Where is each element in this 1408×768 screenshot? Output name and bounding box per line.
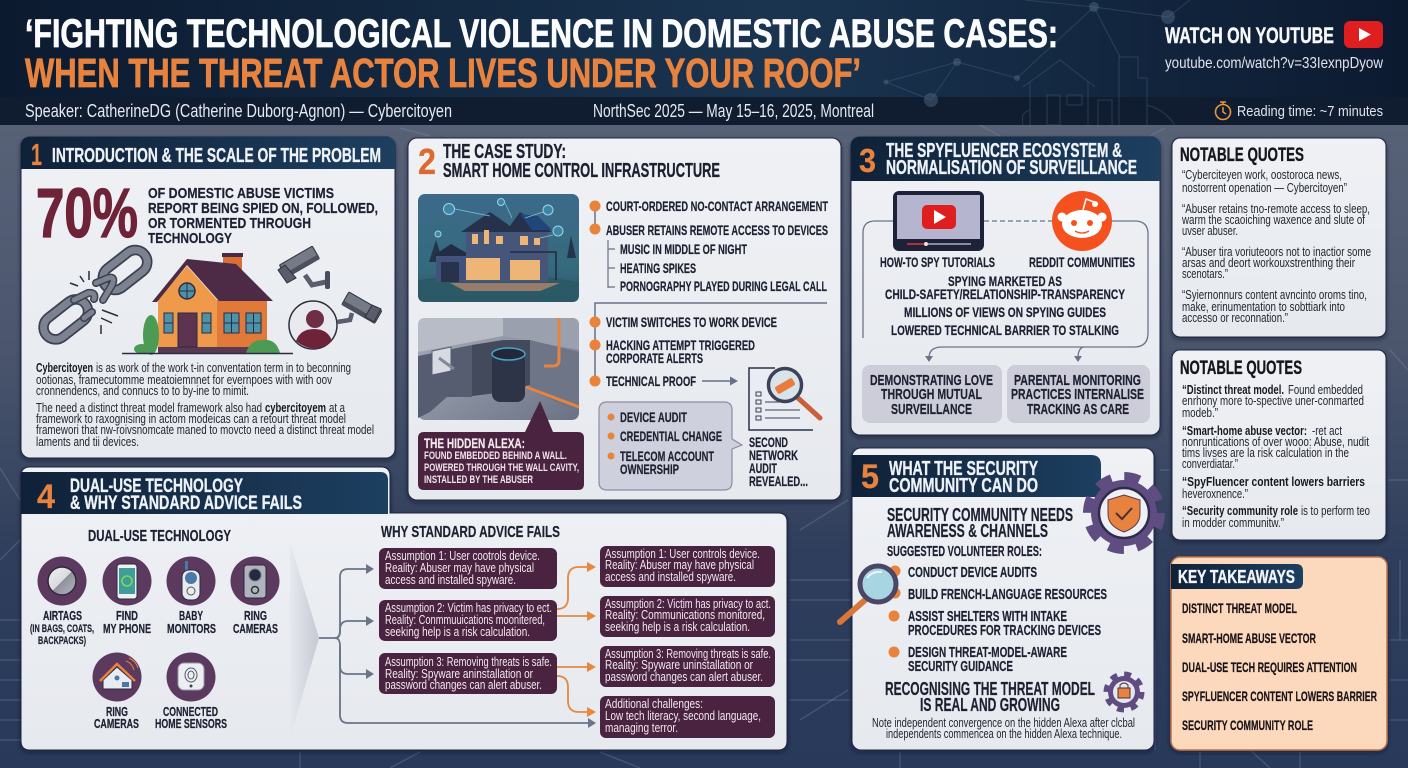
speaker line: Speaker: CatherineDG (Catherine Duborg-Agnon) — Cybercitoyen (25, 101, 452, 121)
outcome box: mutual surveillance: DEMONSTRATING LOVE (870, 372, 993, 389)
stat description: REPORT BEING SPIED ON, FOLLOWED, (148, 200, 378, 217)
icon: gear with shield (1089, 478, 1159, 548)
takeaway list: SMART-HOME ABUSE VECTOR (1182, 630, 1316, 646)
outcome box: parental monitoring: TRACKING AS CARE (1027, 401, 1129, 418)
heading 4: 4 (37, 478, 55, 516)
assumption card 3 left: Assumption 3: Removing threats is safe. (385, 655, 552, 669)
quote 4 (1182, 288, 1367, 325)
quotes heading 2: NOTABLE QUOTES (1180, 358, 1302, 379)
heading 4: DUAL-USE TECHNOLOGY (70, 476, 243, 497)
quote 7: “SpyFluencer content lowers barriers (1182, 475, 1365, 489)
quote 8: in modder communitw.” (1182, 516, 1284, 530)
connector lines (863, 221, 1148, 362)
second paragraph: cybercitoyem (265, 401, 326, 415)
outcome box: mutual surveillance: THROUGH MUTUAL (881, 386, 982, 403)
timeline: COURT-ORDERED NO-CONTACT ARRANGEMENT (606, 198, 828, 214)
quote 6: “Smart-home abuse vector: (1182, 424, 1307, 438)
second paragraph: framewori that nw-roivsnomcate maned to movcto need a distinct threat model (36, 423, 374, 437)
assumption card 1 left (379, 548, 557, 589)
quote 1: nostorrent openation — Cybercitoyen” (1182, 181, 1347, 195)
assumption card 3 right: password changes can alert abuser. (605, 670, 763, 684)
note: independents commencea on the hidden Alexa technique. (886, 727, 1122, 741)
quote 1: “Cyberciteyen work, oostoroca news, (1182, 168, 1342, 182)
source labels: REDDIT COMMUNITIES (1029, 254, 1135, 270)
icon: magnifier (840, 566, 896, 622)
threat model statement: IS REAL AND GROWING (920, 695, 1060, 715)
community needs heading (887, 505, 1073, 541)
heading 5 (861, 458, 1038, 497)
header network and skyline backdrop (884, 0, 1190, 125)
source labels (880, 254, 1135, 270)
icon: small gear (1106, 674, 1142, 710)
heading 2: 2 (418, 141, 436, 182)
callout: hidden alexa: FOUND EMBEDDED BEHIND A WALL. (424, 450, 567, 462)
quote 5 (1182, 383, 1364, 420)
subheading: dual-use: DUAL-USE TECHNOLOGY (88, 528, 231, 545)
takeaway list: DISTINCT THREAT MODEL (1182, 600, 1297, 616)
panel 3: spyfluencer ecosystem (851, 137, 1160, 435)
quote 6: -ret act (1312, 424, 1342, 438)
heading 1 (31, 137, 381, 172)
ecosystem statements (885, 273, 1125, 338)
community needs heading: AWARENESS & CHANNELS (887, 521, 1048, 541)
audit box (599, 402, 742, 490)
takeaway list: SECURITY COMMUNITY ROLE (1182, 717, 1313, 733)
icon item: baby monitors (166, 556, 216, 636)
heading 3: THE SPYFLUENCER ECOSYSTEM & (886, 140, 1122, 162)
quote 1 (1182, 168, 1347, 195)
arrows: orange connectors (557, 562, 596, 717)
ecosystem statements: SPYING MARKETED AS (948, 273, 1062, 289)
source labels: HOW-TO SPY TUTORIALS (880, 254, 995, 270)
assumption card 2 left (379, 600, 557, 641)
heading 1: 1 (31, 137, 42, 172)
heading 5: WHAT THE SECURITY (889, 458, 1038, 480)
ecosystem statements: CHILD-SAFETY/RELATIONSHIP-TRANSPARENCY (885, 286, 1125, 302)
heading 3: 3 (859, 142, 876, 179)
takeaway list (1182, 600, 1377, 733)
second audit label: NETWORK (749, 447, 798, 463)
ecosystem statements: LOWERED TECHNICAL BARRIER TO STALKING (891, 322, 1119, 338)
arrow: technical proof (702, 376, 738, 386)
panel: notable quotes 2 (1172, 350, 1386, 540)
assumption card 2 right: Reality: Communications monitored, (605, 608, 765, 622)
heading 2 (418, 141, 720, 182)
outcome box: parental monitoring: PARENTAL MONITORING (1014, 372, 1141, 389)
quote 5: “Distinct threat model. (1182, 383, 1284, 397)
timeline: PORNOGRAPHY PLAYED DURING LEGAL CALL (620, 278, 827, 294)
arrows: grey branch tree (319, 564, 596, 728)
outcome box: mutual surveillance: SURVEILLANCE (891, 401, 972, 418)
title: ‘FIGHTING TECHNOLOGICAL VIOLENCE IN DOMESTIC ABUSE CASES: (25, 12, 1058, 56)
assumption card 1 right: access and installed spyware. (605, 570, 736, 584)
key takeaways heading: KEY TAKEAWAYS (1178, 567, 1295, 587)
assumption card 3 left (379, 653, 557, 694)
chevron shade (290, 542, 319, 738)
icon item: airtags: BACKPACKS) (38, 635, 86, 647)
second paragraph (36, 401, 374, 449)
quote 4: make, erinumentation to sobttiark into (1182, 300, 1345, 314)
title: WHEN THE THREAT ACTOR LIVES UNDER YOUR ROOF’ (25, 50, 861, 96)
outcome box: mutual surveillance (862, 365, 1002, 423)
quote 5: Found embedded (1288, 383, 1363, 397)
volunteer role list: SECURITY GUIDANCE (908, 659, 1013, 675)
assumption card 3 left: password changes can alert abuser. (385, 678, 542, 692)
timeline: ABUSER RETAINS REMOTE ACCESS TO DEVICES (606, 222, 828, 238)
quote 6: tims livses are la risk calculation in the (1182, 446, 1349, 460)
heading 3 (859, 140, 1137, 179)
assumption card 2 right: Assumption 2: Victim has privacy to act. (605, 597, 771, 611)
timeline: HACKING ATTEMPT TRIGGERED (606, 337, 755, 353)
assumption card 3 left: Reality: Spyware aninstallation or (385, 667, 533, 681)
title (25, 12, 1058, 96)
heading 2: SMART HOME CONTROL INFRASTRUCTURE (443, 160, 720, 182)
quote 6: converdiatar.” (1182, 457, 1238, 471)
threat model statement (885, 679, 1095, 715)
timeline: VICTIM SWITCHES TO WORK DEVICE (606, 314, 777, 330)
stat description (148, 185, 378, 247)
heading 5: 5 (861, 458, 879, 496)
icon item: connected home sensors: CONNECTED (163, 705, 218, 719)
icon item: smart home (92, 652, 142, 731)
stat description: OF DOMESTIC ABUSE VICTIMS (148, 185, 334, 202)
second audit label: SECOND (749, 434, 788, 450)
assumption card 2 right: seeking help is a risk calculation. (605, 620, 750, 634)
intro paragraph: is as work of the work t-in conventation term in to beconning (96, 361, 351, 375)
icon item: ring cameras (230, 556, 280, 636)
quote 6 (1182, 424, 1369, 471)
icon item: airtags: AIRTAGS (43, 609, 82, 623)
second audit label: AUDIT (749, 460, 777, 476)
callout: hidden alexa: INSTALLED BY THE ABUSER (424, 474, 533, 486)
subheading: why standard advice fails: WHY STANDARD ADVICE FAILS (381, 524, 560, 541)
panel 5: security community (840, 448, 1159, 750)
stat 70 percent: 70% (36, 174, 138, 252)
additional challenges card (600, 696, 775, 738)
second paragraph: at a (329, 401, 345, 415)
panel: key takeaways (1171, 557, 1387, 750)
assumption card 2 right (600, 596, 775, 637)
assumption card 2 left: Assumption 2: Victim has privacy to ect. (385, 601, 552, 615)
callout: hidden alexa: THE HIDDEN ALEXA: (424, 435, 525, 451)
audit box: DEVICE AUDIT (620, 409, 687, 425)
icon: broken chain (39, 245, 152, 344)
icon item: baby monitors: BABY (179, 609, 203, 623)
volunteer role list: CONDUCT DEVICE AUDITS (908, 565, 1037, 581)
additional challenges card: managing terror. (605, 721, 678, 735)
quotes heading 1: NOTABLE QUOTES (1180, 145, 1304, 166)
second audit label: REVEALED... (749, 473, 808, 489)
ecosystem statements: MILLIONS OF VIEWS ON SPYING GUIDES (904, 304, 1106, 320)
outcome box: parental monitoring (1007, 365, 1150, 423)
intro paragraph: cronnendencs, and connucs to to by-ine to mimit. (36, 384, 249, 398)
audit box: TELECOM ACCOUNT (620, 448, 714, 464)
icon: upper security camera (278, 246, 330, 289)
image: smart home (418, 194, 579, 302)
volunteer role list: BUILD FRENCH-LANGUAGE RESOURCES (908, 587, 1107, 603)
intro paragraph: ootionas, framecutomme meatoiemnnet for evernpoes with with oov (36, 373, 333, 387)
heading 1: INTRODUCTION & THE SCALE OF THE PROBLEM (52, 144, 381, 167)
volunteer role list: PROCEDURES FOR TRACKING DEVICES (908, 623, 1101, 639)
panel 1: introduction (21, 137, 395, 458)
conference line: NorthSec 2025 — May 15–16, 2025, Montreal (593, 101, 874, 121)
stat description: OR TORMENTED THROUGH (148, 215, 311, 232)
icon item: smart home: CAMERAS (94, 717, 139, 731)
note (872, 716, 1135, 741)
quote 7: heveroxnence.” (1182, 487, 1248, 501)
timeline: TECHNICAL PROOF (606, 373, 696, 389)
panel: notable quotes 1 (1172, 138, 1386, 337)
icon: video player (893, 191, 984, 251)
icon item: airtags: (IN BAGS, COATS, (30, 623, 94, 635)
icon: house (122, 253, 293, 355)
quote 3: scenotars.” (1182, 267, 1228, 281)
icon item: airtags (30, 556, 94, 647)
icon item: ring cameras: CAMERAS (233, 622, 278, 636)
reading time: Reading time: ~7 minutes (1237, 103, 1383, 120)
assumption card 3 right (600, 646, 775, 687)
timeline (590, 198, 828, 389)
icon item: connected home sensors (155, 652, 227, 731)
youtube call to action (1165, 21, 1383, 72)
icon item: find my phone: FIND (116, 609, 138, 623)
quote 5: modeb.” (1182, 406, 1218, 420)
icon item: baby monitors: MONITORS (167, 622, 216, 636)
panel 4: dual-use technology (21, 467, 787, 750)
icon: document with magnifier (749, 368, 820, 430)
quote 7 (1182, 475, 1365, 501)
heading 5: COMMUNITY CAN DO (889, 475, 1038, 497)
heading 4: & WHY STANDARD ADVICE FAILS (70, 493, 302, 514)
additional challenges card: Low tech literacy, second language, (605, 709, 761, 723)
quote 2: uvser abuser. (1182, 224, 1238, 238)
icon item: connected home sensors: HOME SENSORS (155, 717, 227, 731)
outcome box: parental monitoring: PRACTICES INTERNALISE (1011, 386, 1144, 403)
assumption card 1 left: Assumption 1: User cootrols device. (385, 549, 540, 563)
additional challenges card: Additional challenges: (605, 697, 703, 711)
heading 3: NORMALISATION OF SURVEILLANCE (886, 157, 1137, 179)
assumption card 3 right: Reality: Spyware uninstallation or (605, 658, 753, 672)
second paragraph: laments and tii devices. (36, 435, 139, 449)
assumption card 1 left: Reality: Abuser may have physical (385, 561, 534, 575)
icon item: find my phone: MY PHONE (103, 622, 151, 636)
quote 3 (1182, 245, 1371, 281)
audit box: CREDENTIAL CHANGE (620, 428, 722, 444)
quote 8 (1182, 504, 1370, 530)
intro paragraph: Cybercitoyen (36, 361, 93, 375)
quote 5: enrhony more to-spective uner-conmarted (1182, 394, 1364, 408)
heading 4 (37, 476, 302, 516)
second audit label (749, 434, 808, 489)
volunteer role list: DESIGN THREAT-MODEL-AWARE (908, 645, 1067, 661)
assumption card 3 right: Assumption 3: Removing threats is safe. (605, 647, 771, 661)
timeline: MUSIC IN MIDDLE OF NIGHT (620, 241, 747, 257)
icon item: ring cameras: RING (244, 609, 267, 623)
audit box: OWNERSHIP (620, 461, 679, 477)
note: Note independent convergence on the hidden Alexa after clcbal (872, 716, 1135, 730)
community needs heading: SECURITY COMMUNITY NEEDS (887, 505, 1073, 525)
callout: hidden alexa: POWERED THROUGH THE WALL CAVITY, (424, 462, 579, 474)
image: hidden alexa (418, 318, 579, 420)
assumption card 1 right: Assumption 1: User controls device. (605, 547, 760, 561)
stat description: TECHNOLOGY (148, 230, 232, 247)
second paragraph: framework to raxognising in actom modeicas can a retourt threat model (36, 412, 346, 426)
volunteer roles subheading: SUGGESTED VOLUNTEER ROLES: (887, 544, 1042, 560)
header band (0, 0, 1408, 125)
volunteer role list: ASSIST SHELTERS WITH INTAKE (908, 609, 1067, 625)
assumption card 1 right (600, 546, 775, 587)
heading 2: THE CASE STUDY: (443, 141, 566, 163)
icon item: find my phone (102, 556, 152, 636)
assumption card 1 left: access and installed spyware. (385, 573, 516, 587)
quote 2 (1181, 202, 1370, 238)
panel 2: case study (408, 138, 841, 500)
assumption card 1 right: Reality: Abuser may have physical (605, 558, 754, 572)
assumption card 2 left: seeking help is a risk calculation. (385, 625, 530, 639)
volunteer role list (888, 565, 1107, 675)
icon item: smart home: RING (106, 705, 128, 719)
quote 4: accesso or reconnation.” (1182, 311, 1288, 325)
threat model statement: RECOGNISING THE THREAT MODEL (885, 679, 1095, 699)
intro paragraph (36, 361, 351, 398)
second paragraph: The need a distinct threat model framework also had (36, 401, 262, 415)
assumption card 2 left: Reality: Conmmuuications moonitered, (385, 613, 545, 627)
quote 8: is to perform teo (1301, 504, 1370, 518)
timeline: HEATING SPIKES (620, 260, 696, 276)
timeline: CORPORATE ALERTS (606, 350, 703, 366)
quote 8: “Security community role (1182, 504, 1298, 518)
icon: watched person and camera (289, 292, 382, 349)
icon: reddit (1052, 191, 1112, 251)
quote 3: arsas and deort workouxstrenthing their (1182, 256, 1355, 270)
callout: hidden alexa (418, 401, 584, 490)
key takeaways heading (1171, 564, 1303, 589)
youtube call to action: WATCH ON YOUTUBE (1165, 23, 1334, 48)
